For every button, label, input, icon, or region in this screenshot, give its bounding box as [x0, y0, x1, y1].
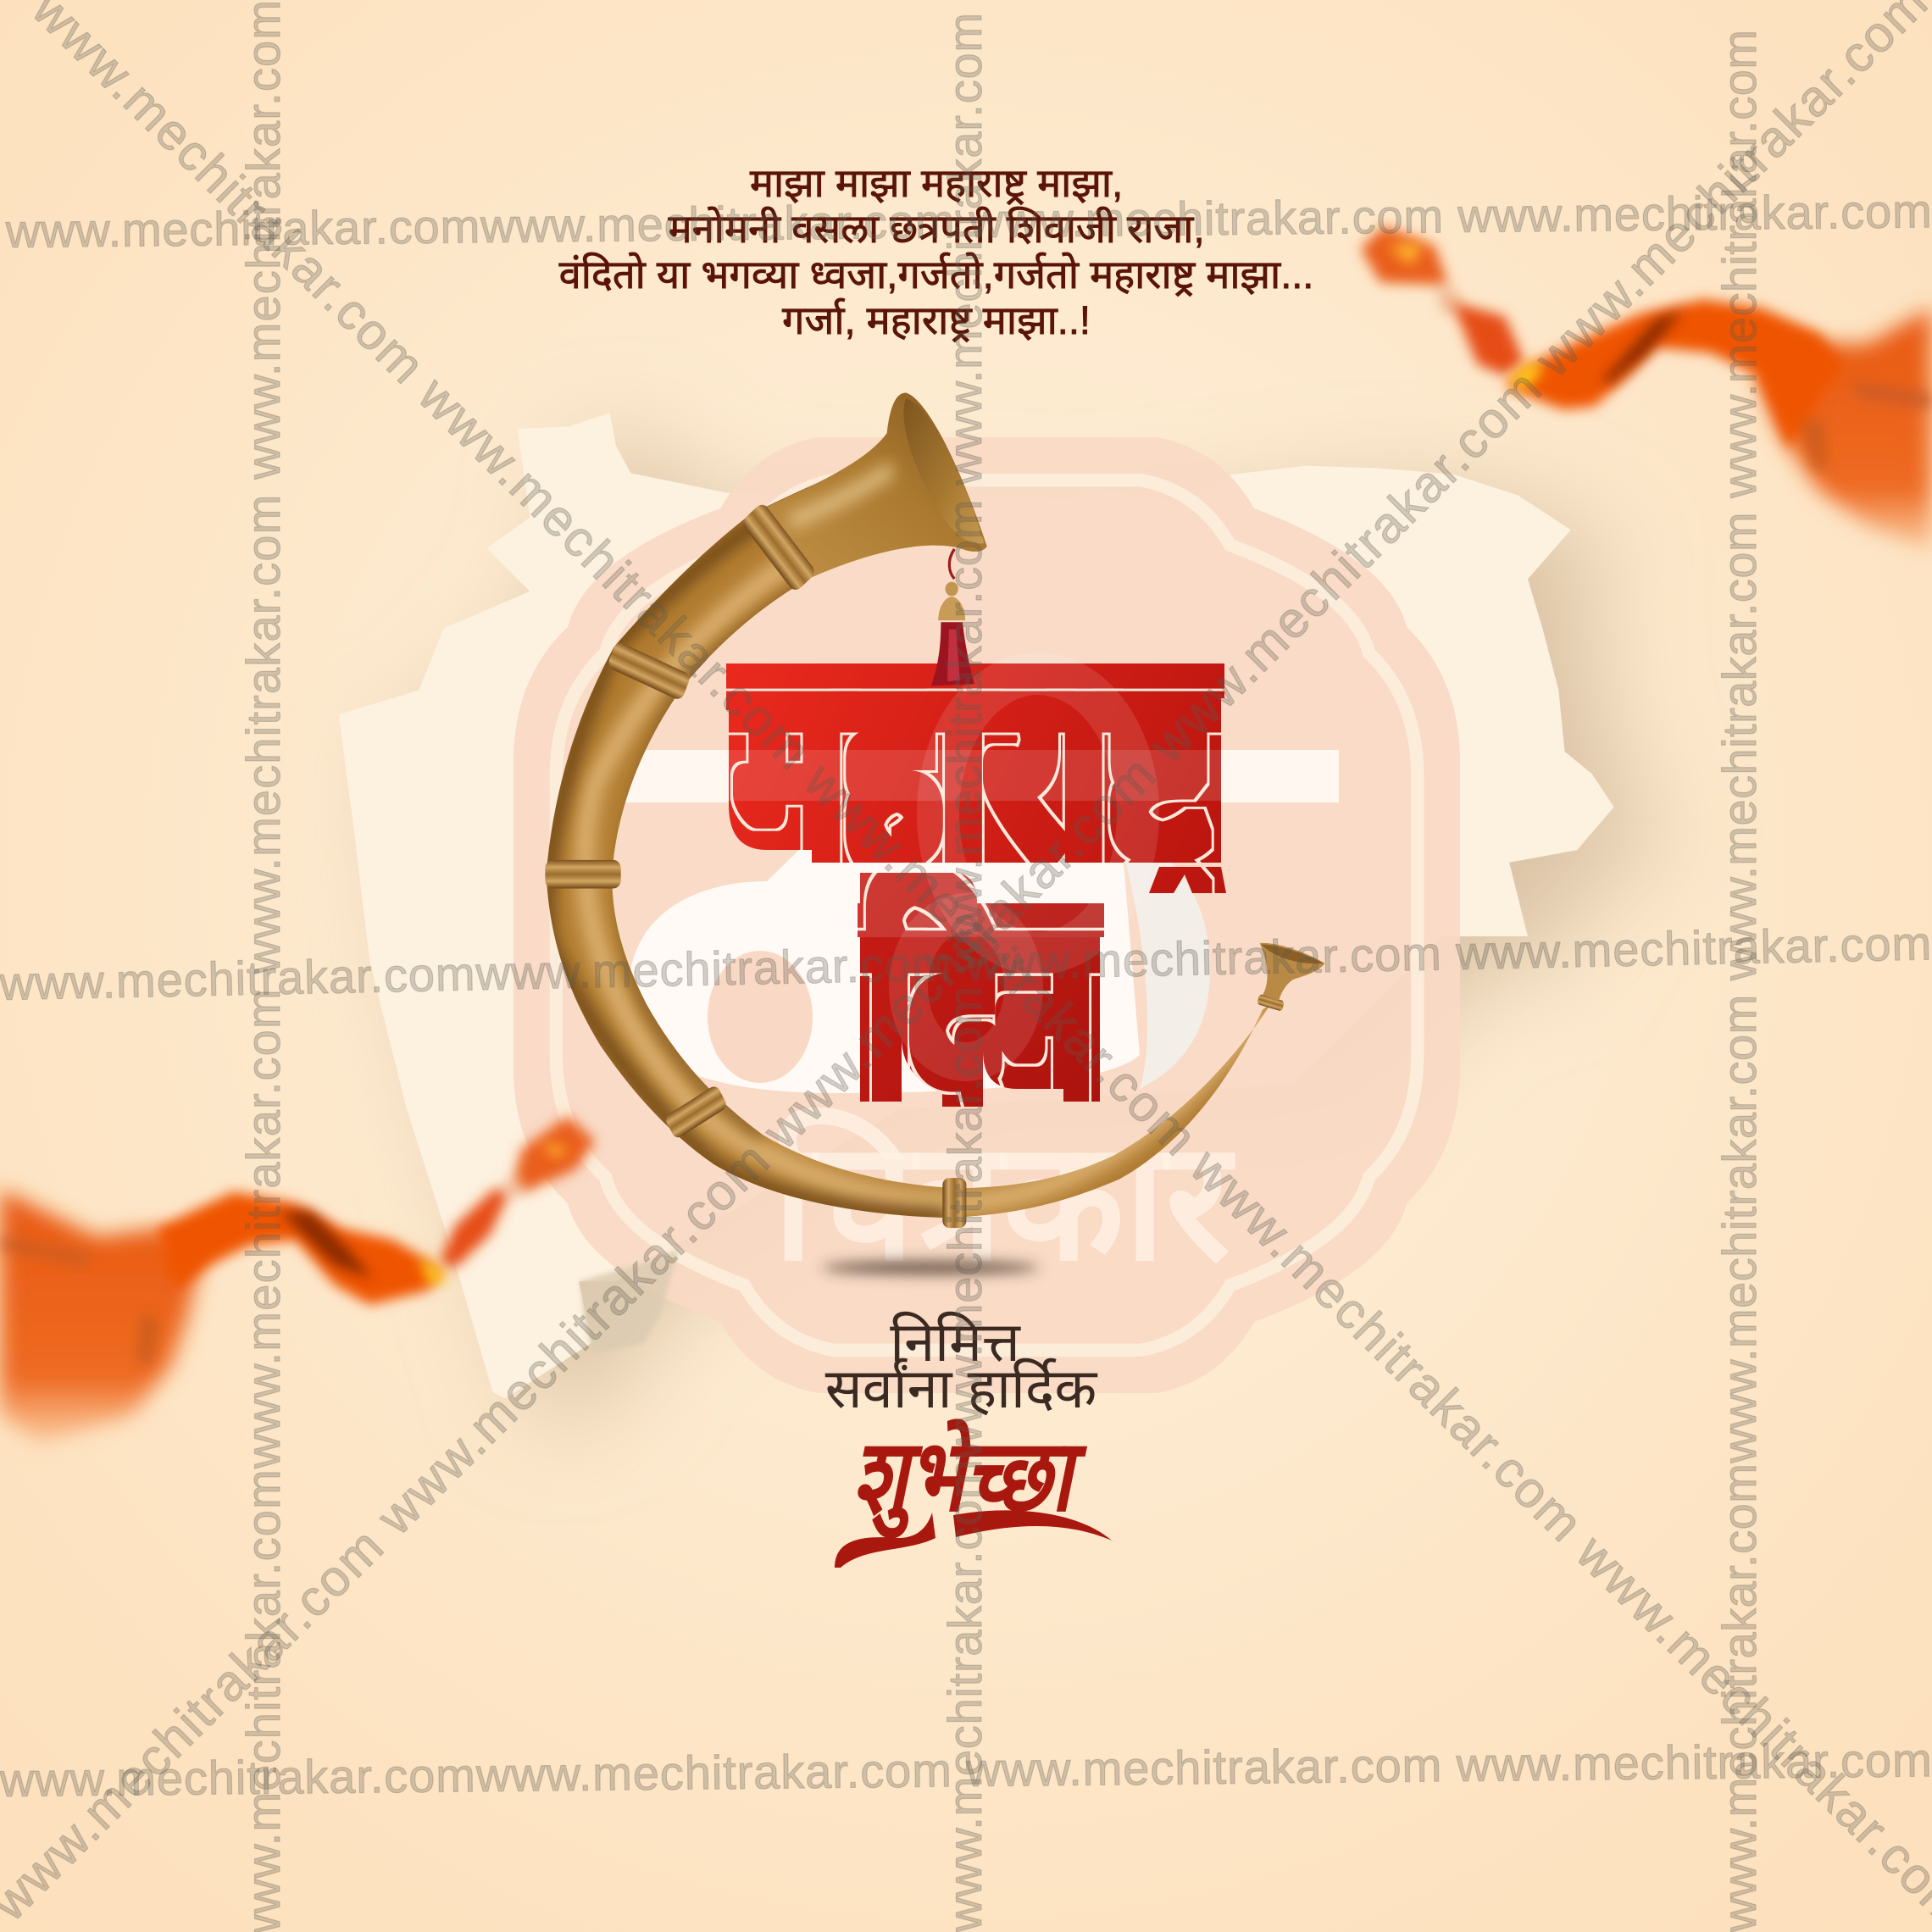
watermark text repeated: www.mechitrakar.comwww.mechitrakar.com www.mechitrakar.com www.mechitrakar.com [236, 0, 290, 1932]
bell highlight [790, 469, 892, 522]
flag: bottom left saffron [0, 1116, 595, 1443]
brass turhi horn [508, 356, 1356, 1288]
shadow under horn [822, 1261, 1039, 1274]
watermark text repeated: www.mechitrakar.comwww.mechitrakar.com www.mechitrakar.com www.mechitrakar.com [1713, 30, 1766, 1932]
stamp tint over title [729, 674, 1221, 1062]
watermark text repeated: www.mechitrakar.comwww.mechitrakar.com www.mechitrakar.com www.mechitrakar.com [0, 916, 1932, 1010]
watermark text repeated: www.mechitrakar.comwww.mechitrakar.com www.mechitrakar.com www.mechitrakar.com [938, 13, 991, 1932]
title: Maharashtra: महाराष्ट्र [735, 636, 1219, 908]
map of Maharashtra [339, 413, 1663, 1425]
title: Din: दिन [865, 869, 1099, 1151]
greeting lines: सर्वांना हार्दिक [825, 1357, 1097, 1419]
horn tube [547, 482, 1269, 1218]
poem: मनोमनी वसला छत्रपती शिवाजी राजा, [668, 206, 1205, 251]
small bell end [1260, 943, 1324, 1001]
greeting lines: निमित्त [890, 1311, 1021, 1373]
flag: top right saffron [1361, 226, 1932, 551]
bell mouth [903, 399, 984, 543]
calligraphic wishes: शुभेच्छा [853, 1418, 1087, 1539]
tassel [931, 549, 974, 686]
watermark text repeated: www.mechitrakar.comwww.mechitrakar.com www.mechitrakar.com www.mechitrakar.com [0, 1733, 1932, 1807]
calligraphic wishes [835, 1418, 1112, 1568]
poem: माझा माझा महाराष्ट्र माझा, [750, 160, 1123, 205]
watermark text repeated: www.mechitrakar.comwww.mechitrakar.com www.mechitrakar.com www.mechitrakar.com [4, 184, 1932, 258]
poem: गर्जा, महाराष्ट्र माझा..! [782, 297, 1091, 342]
map shadow patch seen through stamp [580, 1250, 678, 1354]
watermark stamp seal [514, 437, 1460, 1393]
poem [559, 160, 1313, 342]
poem: वंदितो या भगव्या ध्वजा,गर्जतो,गर्जतो महाराष्ट्र माझा... [559, 252, 1313, 297]
horn rings [545, 502, 1285, 1228]
watermark stamp seal: चित्रकार [770, 1107, 1235, 1294]
horn bell [752, 392, 987, 579]
greeting lines [825, 1311, 1097, 1419]
